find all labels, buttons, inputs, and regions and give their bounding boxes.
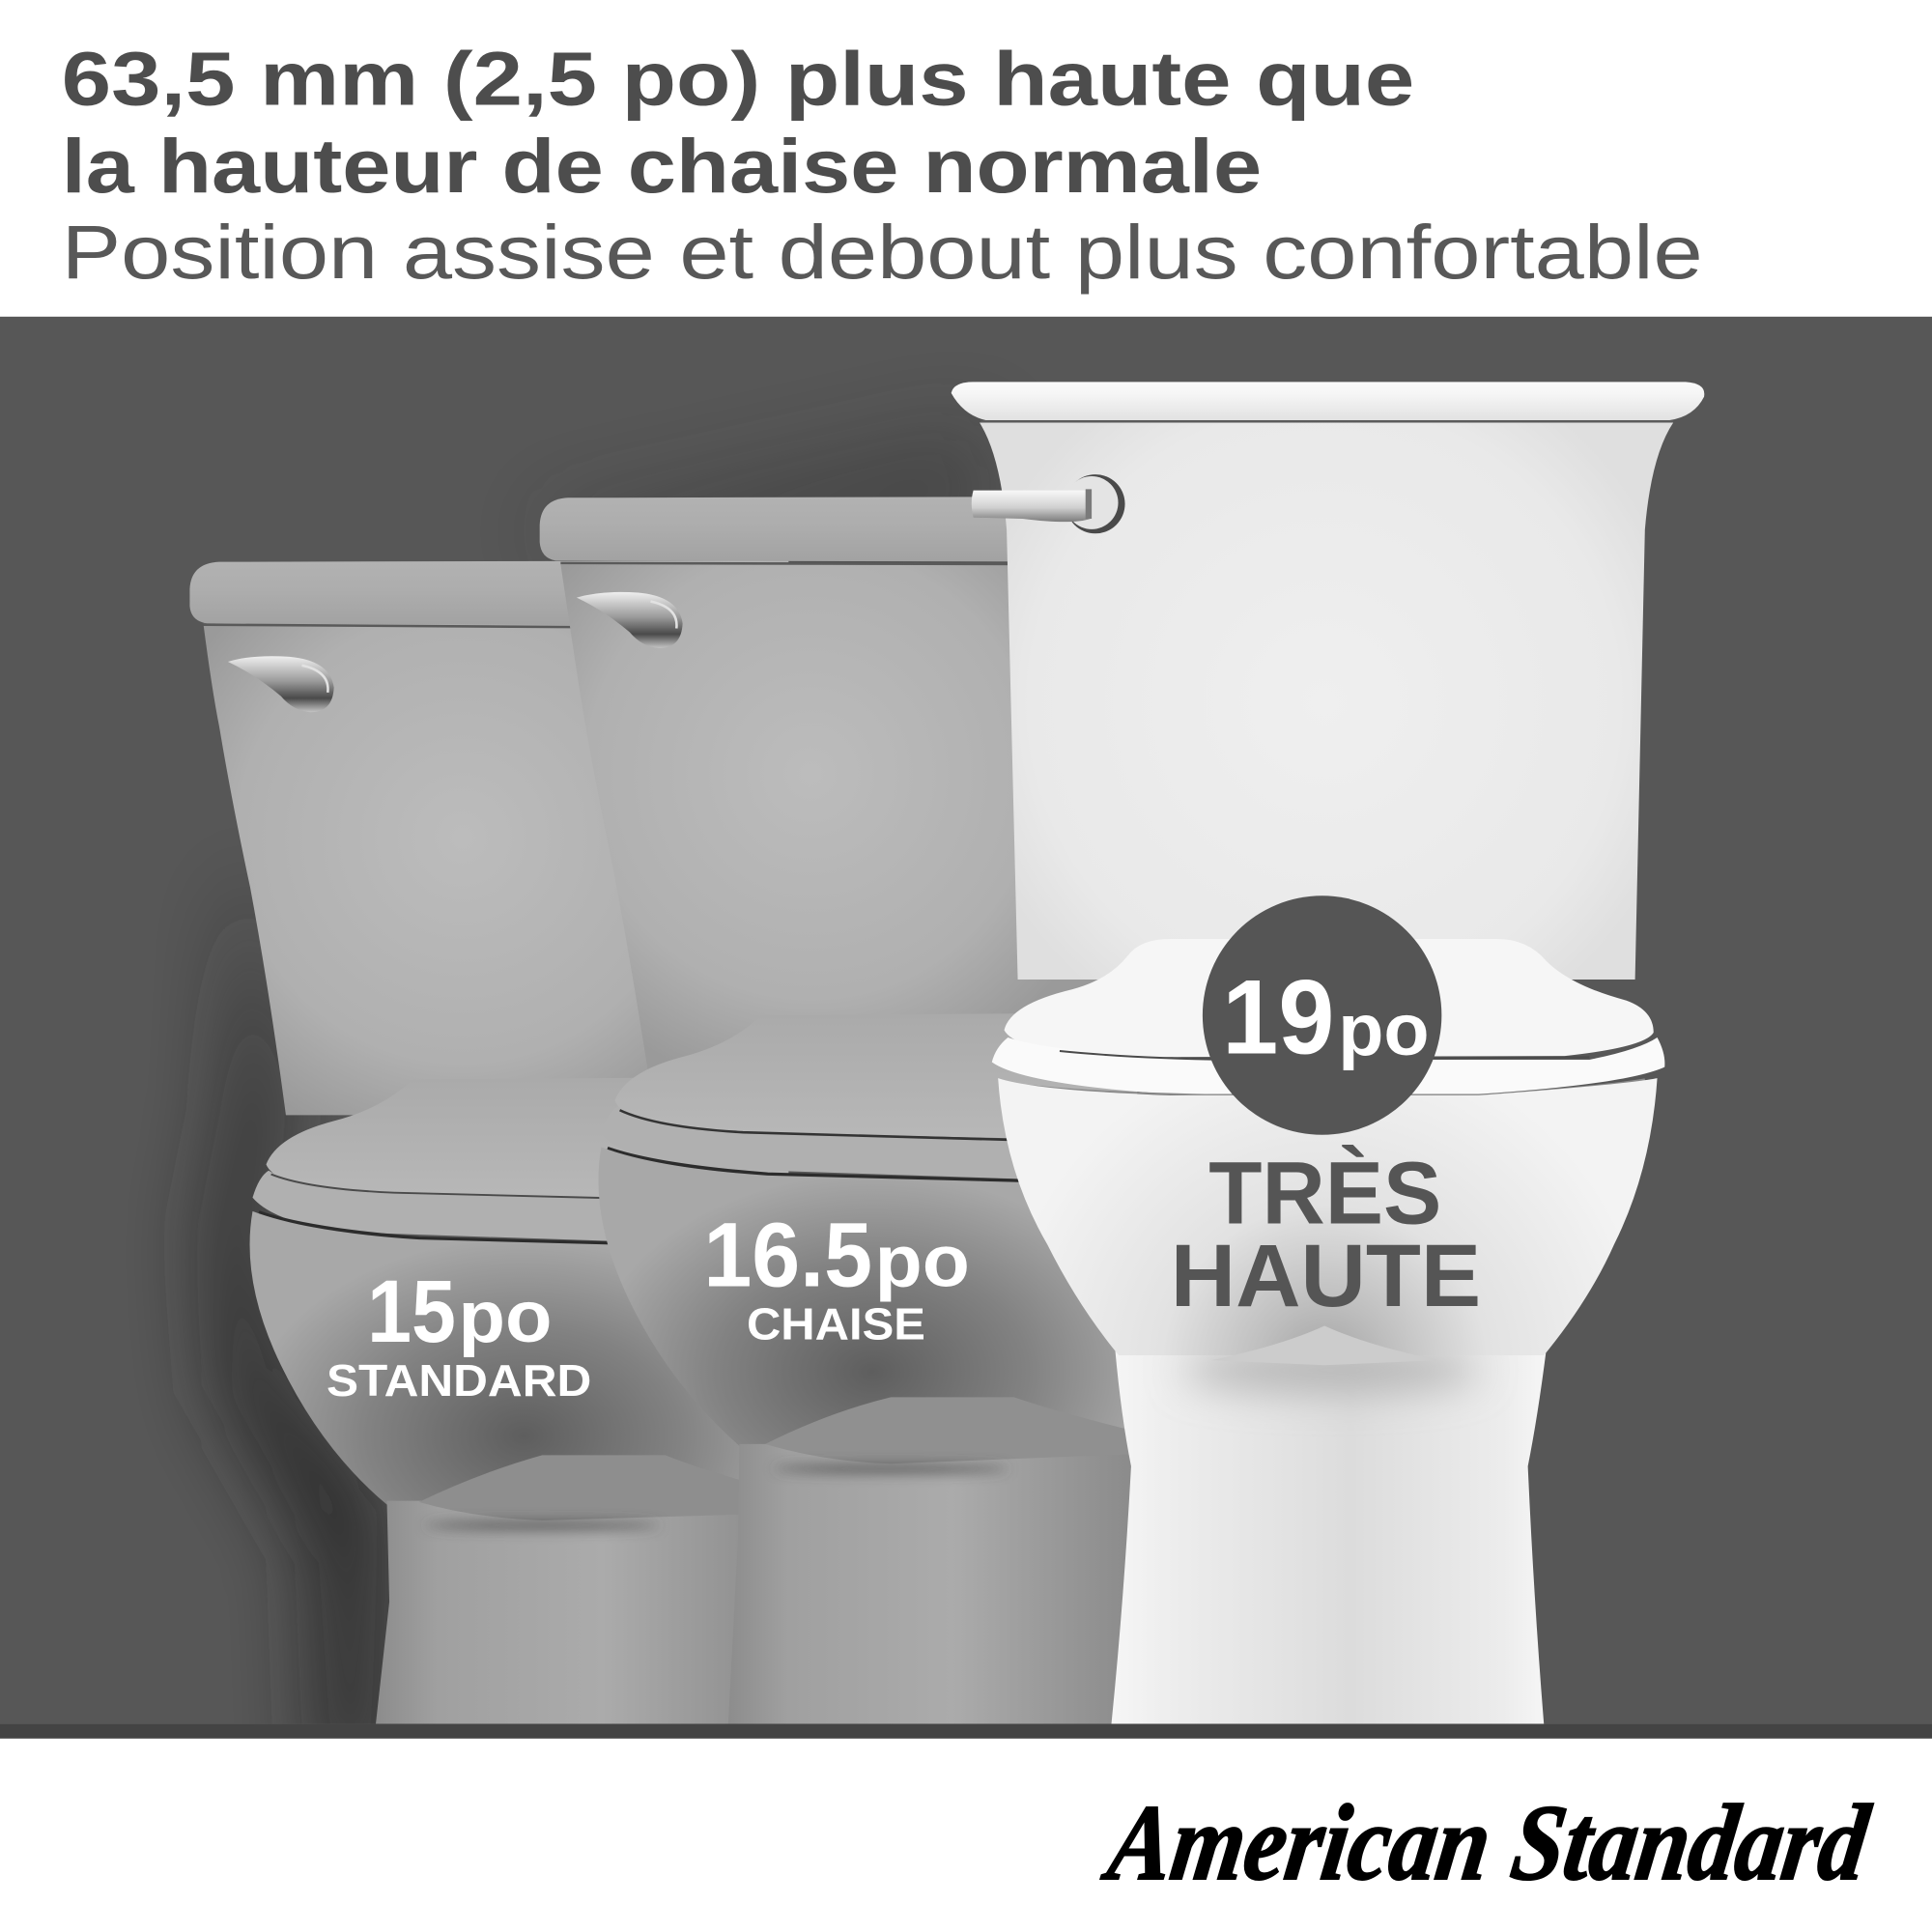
label: 16.5 po chaise <box>703 1206 970 1349</box>
bowl <box>998 1078 1658 1355</box>
badge: 19 po: 19 <box>1222 959 1334 1077</box>
heading: la hauteur de chaise normale <box>62 123 1262 209</box>
bowl <box>598 1148 1137 1449</box>
pedestal <box>740 1444 1131 1723</box>
bowl lower saddle <box>765 1397 1137 1463</box>
rim <box>788 1134 1018 1179</box>
label: 15 po standard <box>327 1263 591 1406</box>
tank lid <box>952 382 1704 420</box>
bowl lower saddle <box>419 1455 788 1520</box>
seat lid <box>1005 939 1654 1057</box>
pedestal <box>1112 1350 1547 1723</box>
label: très haute: TRÈS <box>1208 1144 1441 1243</box>
rim <box>992 1037 1664 1094</box>
label: 15 po standard: 15 <box>367 1263 456 1361</box>
seat lid <box>267 1077 788 1202</box>
bowl <box>250 1211 788 1506</box>
tank <box>980 423 1673 980</box>
wall shadow behind toilets <box>210 419 998 1786</box>
badge: 19 po <box>1203 895 1441 1135</box>
tank <box>203 623 764 1115</box>
flush lever <box>972 474 1125 533</box>
flush handle <box>577 592 683 648</box>
label: 16.5 po chaise: 16.5 <box>703 1206 872 1307</box>
heading: 63,5 mm (2,5 po) plus haute que <box>62 35 1414 121</box>
label: 16.5 po chaise: CHAISE <box>747 1298 925 1349</box>
toilet: 15 in standard <box>189 560 788 1723</box>
seat gaps <box>1060 1051 1589 1060</box>
subheading: Position assise et debout plus confortable <box>62 209 1703 295</box>
heading <box>62 35 1414 209</box>
rim <box>252 1171 788 1247</box>
label: très haute: HAUTE <box>1171 1227 1481 1325</box>
panel: dark grey background <box>0 317 1932 1739</box>
label: 16.5 po chaise: po <box>875 1221 970 1303</box>
seat lid <box>614 1012 1137 1141</box>
seat gaps <box>271 1175 788 1203</box>
tank lid <box>539 497 1008 562</box>
flush handle <box>228 656 334 712</box>
tank lid <box>189 560 788 626</box>
label: très haute <box>1171 1144 1481 1325</box>
toilet: 16.5 in chair height <box>540 497 1137 1747</box>
label: 15 po standard: STANDARD <box>327 1355 591 1406</box>
toilet: 19 in extra tall <box>952 382 1704 1723</box>
bowl lower saddle <box>1211 1325 1439 1365</box>
badge: 19 po: po <box>1338 989 1430 1071</box>
seat gaps <box>619 1109 1007 1142</box>
pedestal <box>376 1501 788 1723</box>
label: 15 po standard: po <box>458 1276 552 1358</box>
